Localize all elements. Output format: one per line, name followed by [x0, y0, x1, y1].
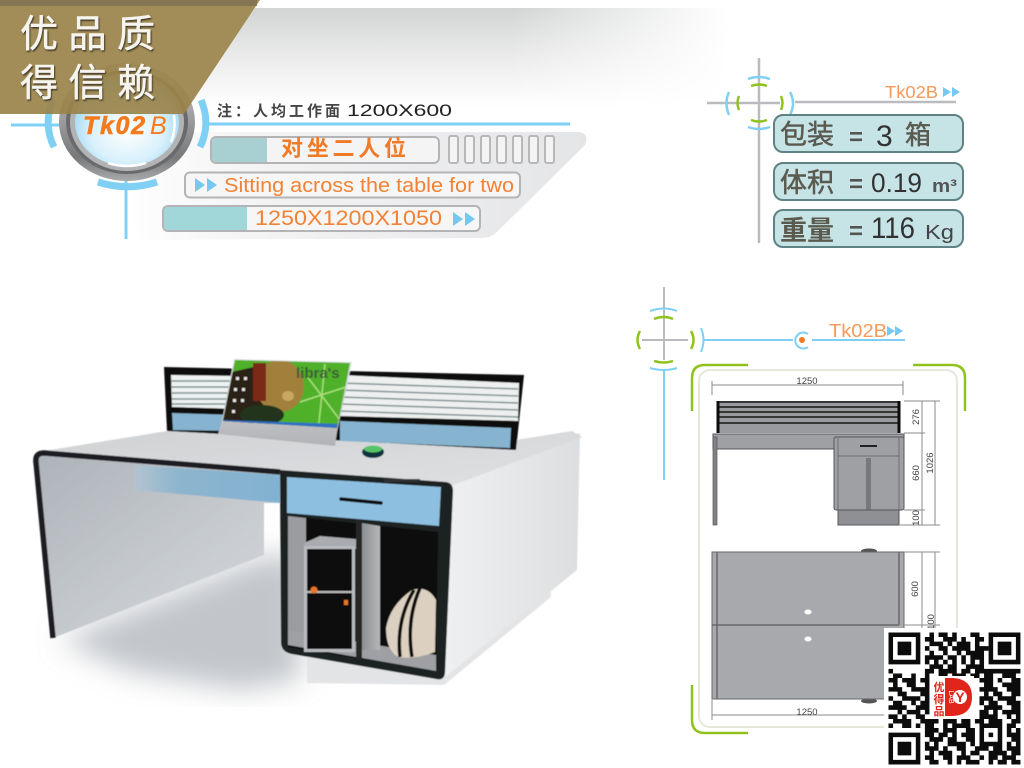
desk top surface — [38, 431, 582, 487]
panel: specifications — [707, 58, 963, 247]
spec: weight: 重量 — [780, 216, 834, 246]
left leg panel — [36, 455, 280, 638]
front elevation — [713, 401, 904, 525]
spec: packaging: 包装 — [780, 120, 834, 150]
drawer handle — [341, 499, 381, 503]
top grey gradient backdrop — [203, 8, 688, 86]
dimension labels: 1250 — [796, 707, 818, 718]
dimension labels: 660 — [911, 465, 922, 481]
spec: packaging — [774, 115, 963, 153]
banner: quality slogan — [0, 0, 260, 114]
monitor: libra's — [296, 365, 340, 382]
spec: packaging: 箱 — [905, 120, 931, 150]
green desktop button — [362, 446, 384, 458]
right side panel — [444, 433, 580, 678]
spec: volume: 0.19 — [871, 168, 922, 198]
model badge ring: B — [150, 112, 167, 140]
floor shadow — [58, 556, 300, 690]
horizontal and vertical blue guide lines — [11, 124, 570, 239]
spec: volume: m³ — [932, 176, 957, 196]
banner: quality slogan: 得信赖 — [20, 63, 155, 105]
model tag — [885, 82, 960, 102]
note: per-person work surface — [217, 101, 452, 120]
QR centre logo: Y — [955, 689, 965, 705]
dimension lines — [712, 381, 940, 720]
banner: quality slogan: 优品质 — [20, 14, 155, 56]
panel: product header — [11, 63, 586, 240]
model tag: Tk02B — [885, 82, 938, 102]
bar: overall dimensions — [163, 206, 480, 231]
spec: volume: = — [849, 171, 863, 198]
crosshair marker — [638, 287, 905, 480]
spec: packaging: 3 — [876, 120, 893, 153]
spec: weight — [774, 210, 963, 247]
spec: weight: 116 — [871, 212, 915, 245]
handbag — [386, 588, 436, 658]
dimension labels: 100 — [926, 614, 937, 630]
note: per-person work surface: 注：人均工作面 — [217, 102, 340, 120]
QR centre logo: 得 — [934, 692, 944, 706]
brand mark — [384, 479, 420, 482]
spec: volume — [774, 163, 963, 200]
panel: technical drawing — [638, 287, 965, 733]
left edge trim — [36, 453, 280, 638]
modesty panel — [135, 465, 280, 503]
model code: Tk02 — [83, 112, 145, 140]
spec: weight: Kg — [925, 222, 954, 244]
screen partition — [164, 367, 524, 450]
dimension labels: 1026 — [925, 452, 936, 474]
bar: product name: 对坐二人位 — [281, 136, 406, 161]
dimension labels: 100 — [911, 510, 922, 526]
bar: overall dimensions: 1250X1200X1050 — [255, 207, 442, 230]
bar: English description: Sitting across the table for two — [224, 175, 514, 197]
spec: weight: = — [849, 218, 863, 245]
plinth — [307, 585, 551, 685]
shelf interior — [288, 516, 438, 671]
QR centre logo: LAB — [947, 690, 954, 704]
QR centre logo — [933, 676, 974, 718]
drawer — [287, 477, 441, 526]
dimension labels: 600 — [910, 581, 921, 597]
crosshair marker — [707, 58, 956, 243]
dimension labels: 276 — [911, 409, 922, 425]
model badge ring — [48, 63, 206, 187]
decorative cells — [449, 136, 554, 163]
QR code — [884, 628, 1024, 768]
bar: product name — [211, 136, 439, 163]
model tag: Tk02B — [829, 321, 887, 341]
spec: packaging: = — [849, 124, 863, 151]
QR centre logo: 品 — [934, 705, 944, 718]
monitor — [218, 358, 355, 446]
plan view — [712, 548, 904, 704]
desk product render — [36, 358, 582, 690]
QR centre logo: 优 — [934, 680, 944, 694]
header background panel — [120, 132, 586, 240]
pedestal cabinet — [280, 470, 453, 679]
note: per-person work surface: 1200X600 — [347, 101, 452, 120]
spec: volume: 体积 — [780, 168, 834, 198]
dimension labels: 1250 — [796, 376, 818, 387]
dimension labels — [796, 376, 937, 718]
computer tower — [304, 536, 356, 652]
green corner brackets — [692, 365, 965, 733]
drawing frame — [699, 370, 957, 727]
